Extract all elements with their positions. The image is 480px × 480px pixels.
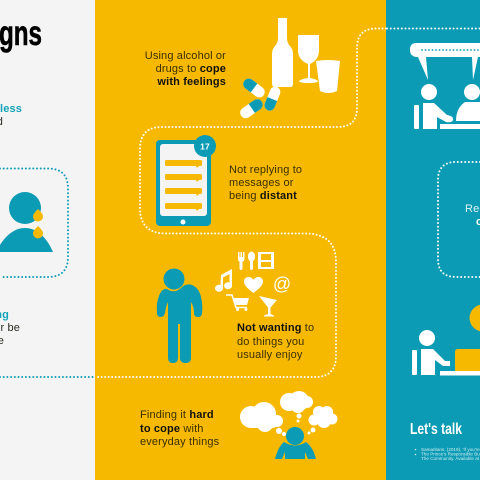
icon: crying person [0, 192, 53, 252]
text: not replying: Not replying to [229, 164, 302, 176]
text: not replying: being distant [229, 190, 297, 202]
text: hard to cope: Finding it hard [140, 409, 214, 421]
references: The Community. Available at [421, 456, 480, 461]
notification badge: 17 [200, 142, 210, 152]
dotted path: left panel [0, 376, 95, 378]
table [440, 371, 480, 376]
text: not wanting: usually enjoy [237, 349, 303, 361]
text: not replying [229, 164, 302, 202]
panel: left grey [0, 0, 95, 480]
text: not wanting: Not wanting to [237, 322, 314, 334]
references [415, 447, 480, 461]
icon: film [258, 252, 274, 269]
dotted frame: recognise [438, 162, 480, 277]
text block: left lower [0, 309, 20, 347]
text: alcohol or drugs: with feelings [156, 76, 226, 88]
text block: restless [0, 103, 22, 128]
icons: enjoyable activities [215, 252, 291, 316]
heading: let's talk: Let's talk [410, 421, 462, 438]
person left [412, 330, 450, 375]
icon: martini glass [259, 296, 277, 316]
text: not replying: messages or [229, 177, 294, 189]
icon: music note [215, 269, 232, 292]
text: recognise [465, 203, 480, 228]
title: gns [0, 14, 42, 53]
text: not wanting [237, 322, 314, 361]
text: alcohol or drugs: drugs to cope [156, 63, 226, 75]
icon: bottle and glasses [272, 18, 340, 93]
icon: tears [33, 209, 43, 238]
panel: middle yellow [95, 0, 386, 480]
text: hard to cope: everyday things [140, 436, 220, 448]
speech bubble [410, 43, 480, 80]
text: not wanting: do things you [237, 336, 304, 348]
dotted path: right panel top [387, 28, 480, 30]
icon: tablet with messages [156, 135, 216, 226]
text block: left lower: r be [0, 322, 20, 334]
icon: person head down [275, 427, 316, 459]
icon: pills [238, 76, 282, 120]
references: The Prince's Responsible Bu [421, 452, 480, 456]
text: alcohol or drugs [145, 50, 226, 88]
dotted frame: crying person [0, 168, 68, 277]
dotted path: middle panel [95, 28, 386, 377]
icon: shopping cart [226, 295, 249, 311]
references: Samaritans, (2019), 'If you're [421, 447, 480, 452]
person left [414, 84, 453, 129]
text: hard to cope: to cope with [140, 423, 204, 435]
icon: standing person [157, 268, 202, 363]
table [440, 124, 480, 129]
message bars [165, 160, 202, 211]
icon: two people talking with speech bubble [410, 43, 480, 129]
person right [456, 84, 480, 121]
icon: at sign: @ [273, 274, 291, 294]
text: hard to cope [140, 409, 220, 448]
text: alcohol or drugs: Using alcohol or [145, 50, 226, 62]
panel: right teal [386, 0, 480, 480]
icon: heart [244, 277, 263, 293]
person right yellow [455, 304, 480, 371]
icon: cutlery [238, 252, 255, 270]
icon: thought clouds [240, 391, 338, 436]
icon: two people at desk [412, 304, 480, 376]
